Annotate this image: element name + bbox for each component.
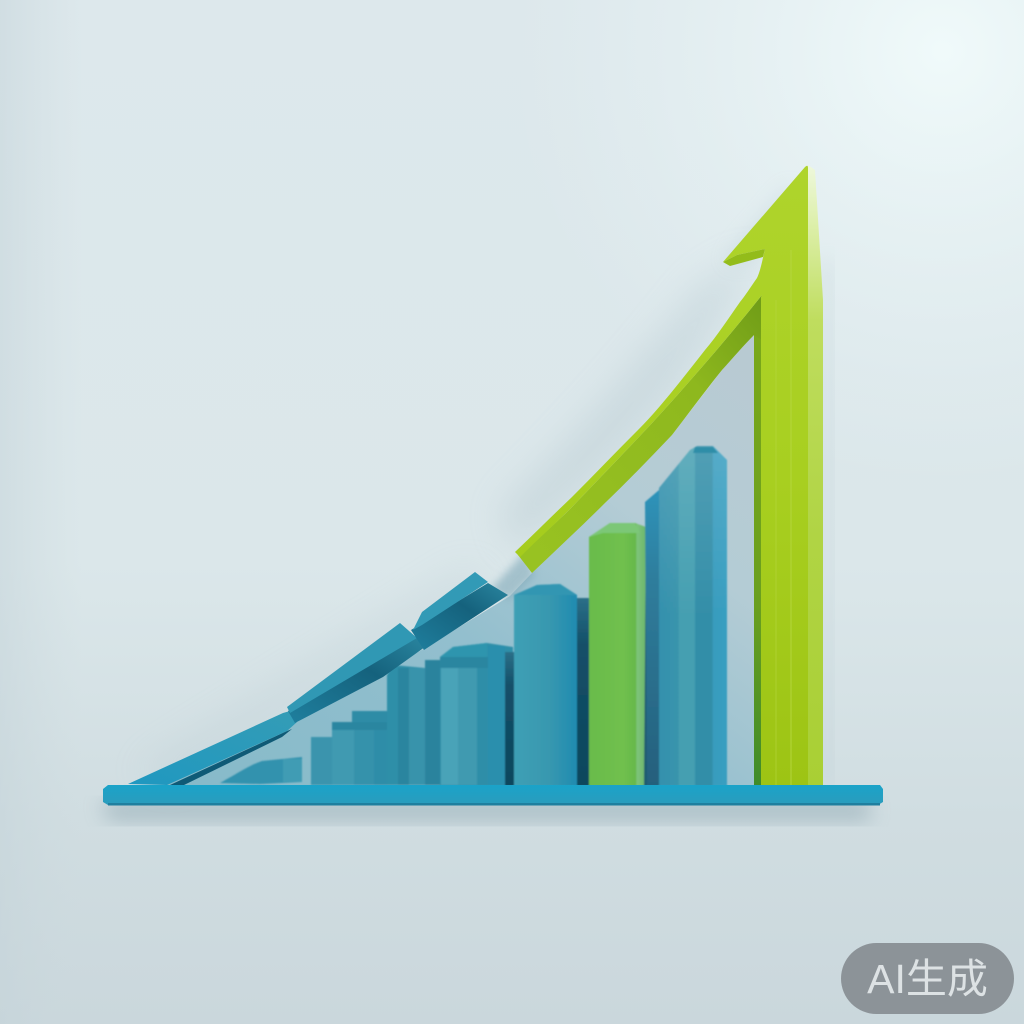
segment three <box>411 572 508 650</box>
bar: stepped cluster <box>311 711 387 785</box>
bar: fourth teal <box>440 643 514 786</box>
bar: tall blue <box>645 446 727 786</box>
rising segments in blue <box>128 572 508 786</box>
shaded backdrop under the arrow <box>165 332 756 786</box>
green arrow <box>515 165 823 787</box>
shelf baseline <box>103 785 883 806</box>
arrow column dark edge <box>754 335 762 787</box>
segment one <box>128 711 297 786</box>
badge: AI generated: AI生成 <box>867 956 988 1002</box>
badge: AI generated <box>841 943 1014 1014</box>
soft shadows on wall <box>100 185 870 818</box>
bar chart <box>220 446 727 786</box>
bar: third teal <box>387 660 440 785</box>
column highlights <box>775 250 792 787</box>
segment two <box>287 623 425 723</box>
bar: green <box>589 523 650 786</box>
shaft underside <box>518 295 762 573</box>
pale right side of column <box>808 165 823 787</box>
bar: small curved stub <box>220 757 302 784</box>
arrow head wing <box>723 249 765 266</box>
shadow in gap between blue and green segments <box>490 552 535 600</box>
arrow body: head, top face of shaft and column front <box>515 166 808 787</box>
bar: fifth blue <box>514 584 589 786</box>
